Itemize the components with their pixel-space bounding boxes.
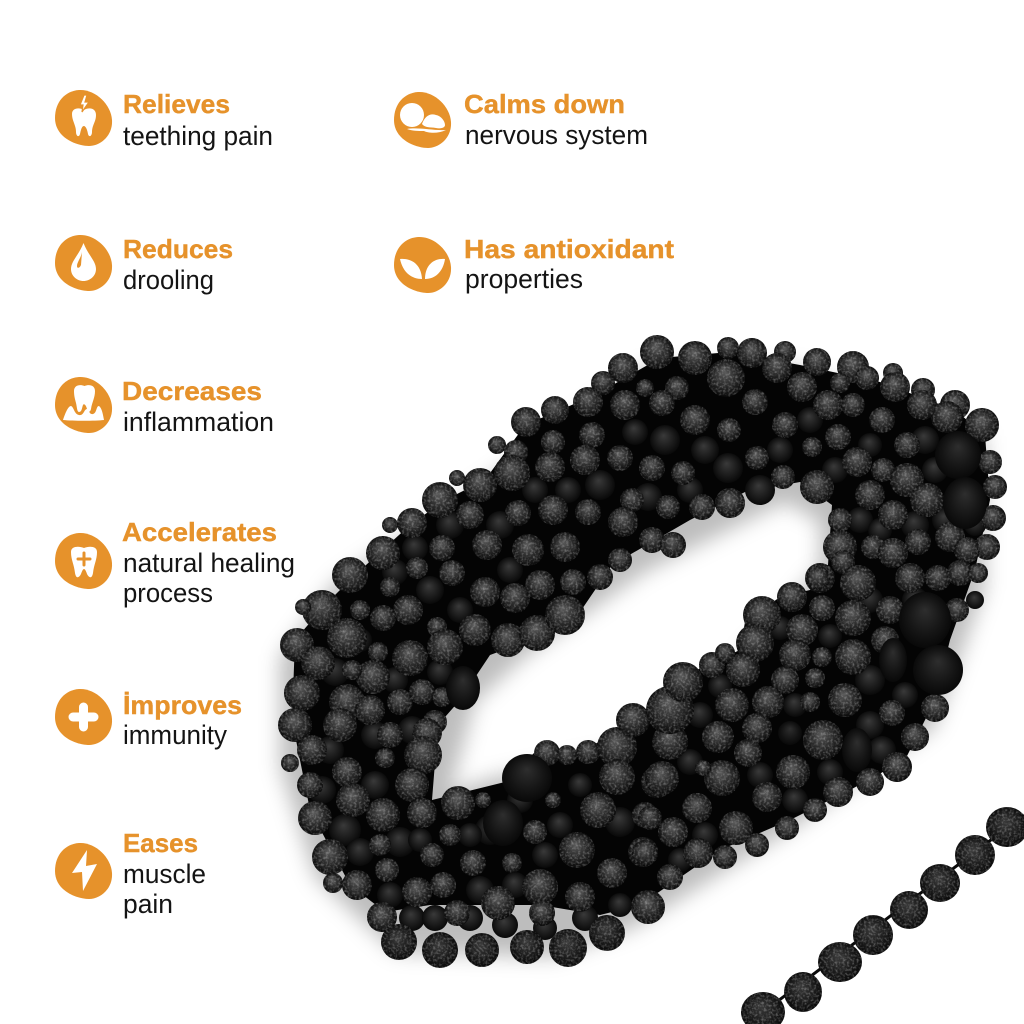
- amber bead necklace bundle: [278, 335, 1007, 968]
- text: pain: [123, 889, 173, 919]
- icon: tooth with pain bolt: [55, 90, 112, 146]
- text: drooling: [123, 265, 214, 295]
- bottom strand beads: [381, 915, 625, 968]
- text: properties: [465, 264, 583, 294]
- heading: Reduces: [123, 234, 233, 264]
- benefit: calms down nervous system: [394, 89, 648, 150]
- benefit: eases muscle pain: [55, 828, 206, 919]
- icon: sleeping baby: [394, 92, 451, 148]
- heading: Eases: [123, 828, 198, 858]
- heading: Decreases: [122, 376, 262, 406]
- benefit: reduces drooling: [55, 234, 233, 295]
- icon: plus: [55, 689, 112, 745]
- benefit: has antioxidant properties: [394, 234, 674, 294]
- text: muscle: [123, 859, 206, 889]
- benefit: accelerates natural healing process: [55, 517, 295, 608]
- text: process: [123, 578, 213, 608]
- text: inflammation: [123, 407, 274, 437]
- heading: İmproves: [123, 690, 242, 720]
- top band: [608, 353, 638, 383]
- heading: Has antioxidant: [464, 234, 674, 264]
- icon: drop: [55, 235, 112, 291]
- text: natural healing: [123, 548, 295, 578]
- benefit: improves immunity: [55, 689, 242, 750]
- large matte beads: [446, 431, 987, 846]
- heading: Calms down: [464, 89, 625, 119]
- benefit: relieves teething pain: [55, 89, 273, 151]
- icon: lightning bolt: [55, 843, 112, 899]
- left band: [463, 468, 497, 502]
- icon: leaves: [394, 237, 451, 293]
- loose bead strand, bottom right: [741, 807, 1024, 1024]
- heading: Accelerates: [122, 517, 277, 547]
- icon: tooth in gum: [55, 377, 112, 433]
- heading: Relieves: [123, 89, 230, 119]
- icon: tooth with plus: [55, 533, 112, 589]
- text: nervous system: [465, 120, 648, 150]
- text: teething pain: [123, 121, 273, 151]
- necklace soft shadow: [280, 367, 985, 957]
- benefit: decreases inflammation: [55, 376, 274, 437]
- text: immunity: [123, 720, 227, 750]
- back layer beads: [308, 407, 986, 940]
- bottom and lower band: [502, 853, 522, 873]
